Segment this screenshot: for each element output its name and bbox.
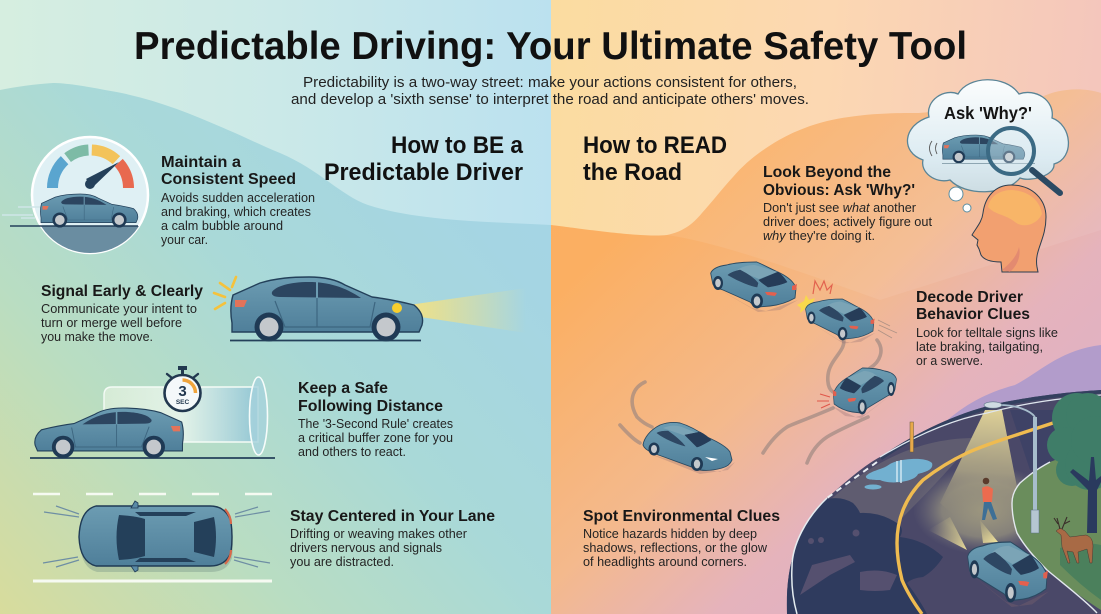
text: maintain a consistent speed: a calm bubble around xyxy=(161,218,283,233)
background: left panel xyxy=(0,0,551,614)
text: stay centered in your lane: drivers nervous and signals xyxy=(290,540,442,555)
text: stay centered in your lane: you are distracted. xyxy=(290,554,394,569)
grass verge xyxy=(1012,445,1101,610)
heading: How to BE a Predictable Driver xyxy=(324,132,524,186)
text: look beyond the obvious: why they're doing it. xyxy=(763,228,875,243)
text: signal early and clearly: Signal Early & Clearly xyxy=(41,283,203,300)
text: keep a safe following distance: Keep a Safe xyxy=(298,380,388,397)
subtitle: Predictability is a two-way street: make your actions consistent for others, xyxy=(303,74,797,91)
text: spot environmental clues: of headlights around corners. xyxy=(583,554,747,569)
text: signal early and clearly: you make the move. xyxy=(41,329,153,344)
text: look beyond the obvious: driver does; actively figure out xyxy=(763,214,932,229)
text: maintain a consistent speed: and braking, which creates xyxy=(161,204,311,219)
icon: car centered in lane xyxy=(33,494,272,581)
text: keep a safe following distance: Following Distance xyxy=(298,398,443,415)
icon: puddle xyxy=(864,422,932,490)
icon: stopwatch: SEC xyxy=(176,399,189,406)
subtitle xyxy=(291,74,809,108)
text: decode driver behavior clues: or a swerve. xyxy=(916,353,983,368)
icon: thought bubble with magnified car: Ask 'Why?' xyxy=(944,103,1032,123)
text: spot environmental clues: Notice hazards hidden by deep xyxy=(583,526,757,541)
icon: signaling car xyxy=(214,277,526,342)
text: decode driver behavior clues: Behavior Clues xyxy=(916,306,1030,323)
icon: car braking xyxy=(711,262,798,312)
title: Predictable Driving: Your Ultimate Safety Tool xyxy=(134,25,967,68)
text: maintain a consistent speed xyxy=(161,154,315,247)
icon: pedestrian xyxy=(982,478,997,520)
text: decode driver behavior clues xyxy=(916,289,1058,368)
text: keep a safe following distance xyxy=(298,380,453,459)
heading: How to BE a Predictable Driver: How to BE a xyxy=(391,132,524,159)
text: decode driver behavior clues: late braking, tailgating, xyxy=(916,339,1043,354)
text: look beyond the obvious xyxy=(763,164,932,243)
text: maintain a consistent speed: your car. xyxy=(161,232,208,247)
icon: following distance with stopwatch xyxy=(30,366,275,458)
text: signal early and clearly: Communicate your intent to xyxy=(41,301,197,316)
icon: tree xyxy=(1047,393,1101,533)
text: look beyond the obvious: Obvious: Ask 'Why?' xyxy=(763,182,915,199)
icon: car with headlights xyxy=(643,422,735,474)
background: right panel xyxy=(551,0,1101,614)
text: spot environmental clues xyxy=(583,508,780,569)
text: spot environmental clues: Spot Environmental Clues xyxy=(583,508,780,525)
icon: street lamp xyxy=(984,402,1039,533)
illustration: curved road at dusk xyxy=(787,390,1101,614)
heading: How to READ the Road: How to READ xyxy=(583,132,727,159)
icon: tree shadow xyxy=(787,498,943,614)
text: stay centered in your lane: Drifting or weaving makes other xyxy=(290,526,468,541)
icon: car at night xyxy=(968,542,1049,607)
illustration: swerving cars and skid marks xyxy=(620,262,897,474)
text: keep a safe following distance: The '3-Second Rule' creates xyxy=(298,416,453,431)
icon: tailgating car xyxy=(806,299,875,344)
text: stay centered in your lane xyxy=(290,508,495,569)
text: decode driver behavior clues: Decode Driver xyxy=(916,289,1023,306)
text: keep a safe following distance: a critical buffer zone for you xyxy=(298,430,453,445)
heading: How to BE a Predictable Driver: Predictable Driver xyxy=(324,159,523,186)
icon: head profile xyxy=(972,185,1046,272)
icon: thought bubble with magnified car xyxy=(907,80,1068,212)
text: spot environmental clues: shadows, reflections, or the glow xyxy=(583,540,768,555)
text: maintain a consistent speed: Consistent Speed xyxy=(161,171,296,188)
text: keep a safe following distance: and others to react. xyxy=(298,444,406,459)
text: decode driver behavior clues: Look for telltale signs like xyxy=(916,325,1058,340)
icon: stopwatch xyxy=(164,366,200,411)
heading: How to READ the Road xyxy=(583,132,727,186)
icon: stopwatch: 3 xyxy=(178,383,187,400)
heading: How to READ the Road: the Road xyxy=(583,159,682,186)
icon: speedometer with car xyxy=(2,137,150,256)
text: look beyond the obvious: Don't just see what another xyxy=(763,200,917,215)
text: signal early and clearly xyxy=(41,283,203,344)
text: stay centered in your lane: Stay Centered in Your Lane xyxy=(290,508,495,525)
icon: deer xyxy=(1054,517,1093,563)
subtitle: and develop a 'sixth sense' to interpret the road and anticipate others' moves. xyxy=(291,91,809,108)
icon: swerving car xyxy=(832,368,896,418)
icon: impact flash xyxy=(797,281,832,313)
text: maintain a consistent speed: Maintain a xyxy=(161,154,241,171)
text: look beyond the obvious: Look Beyond the xyxy=(763,164,891,181)
text: maintain a consistent speed: Avoids sudden acceleration xyxy=(161,190,315,205)
text: signal early and clearly: turn or merge well before xyxy=(41,315,182,330)
